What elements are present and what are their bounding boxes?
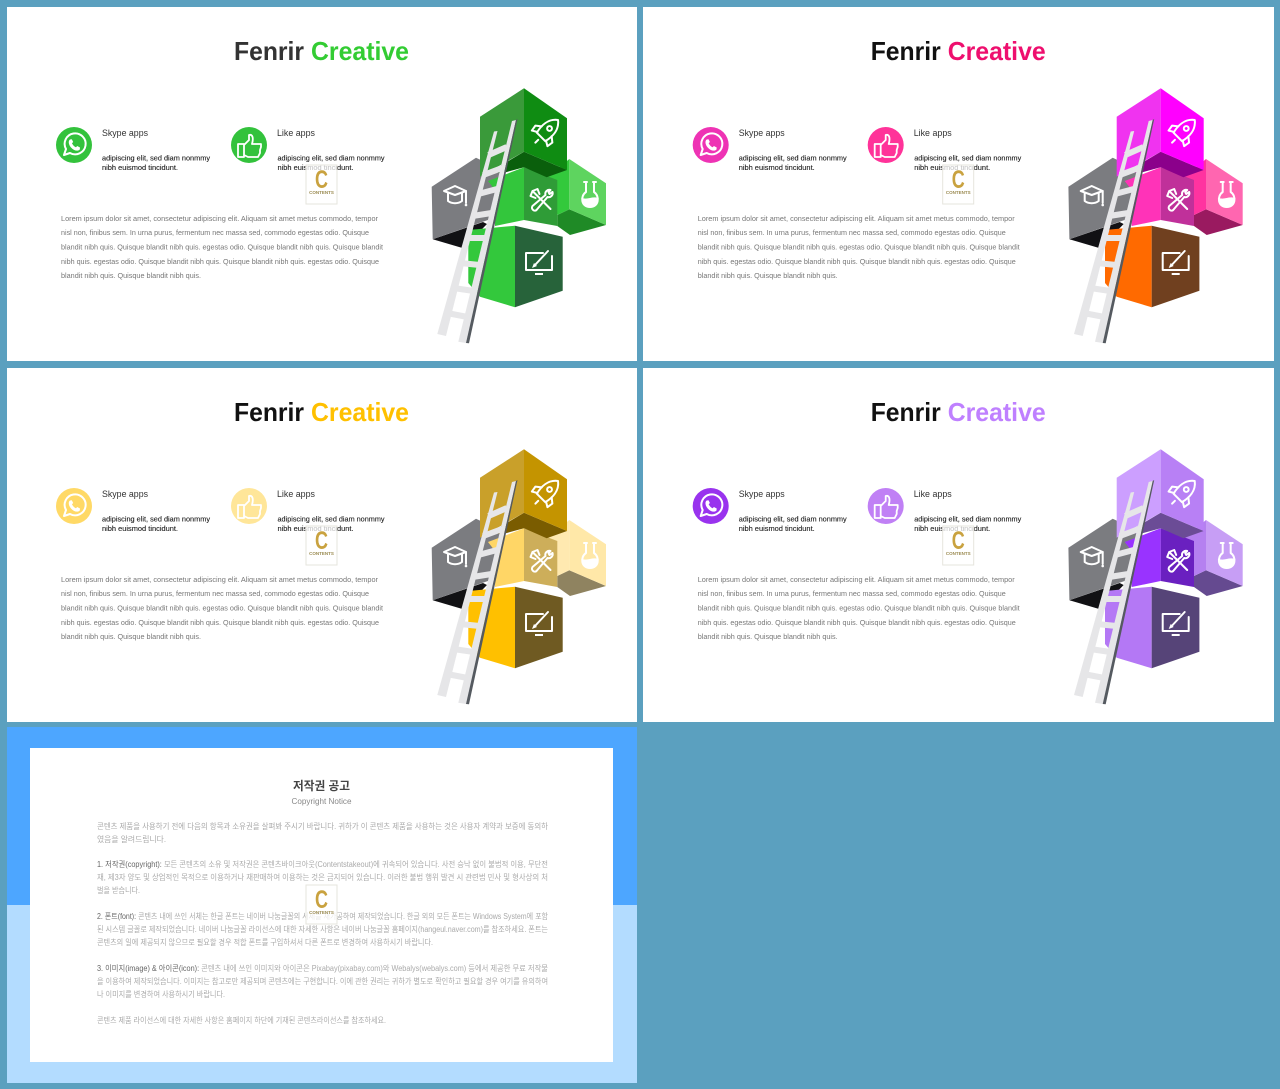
icon: whatsapp circle — [56, 127, 92, 163]
title — [234, 397, 409, 427]
copyright heading: Copyright Notice — [292, 796, 352, 806]
ladder — [437, 119, 518, 343]
clause 1: copyright: 벌을 받습니다. — [97, 885, 140, 895]
body text: nibh quis. egestas odio. Quisque blandit nibh quis. Quisque blandit nibh quis. egestas odio. Quisque — [61, 259, 379, 266]
feature: Skype apps — [102, 489, 210, 533]
title — [871, 36, 1046, 66]
feature: Skype apps: Skype apps — [102, 489, 148, 499]
title: Creative — [948, 36, 1046, 66]
title: Fenrir — [234, 397, 304, 427]
feature: Skype apps: adipiscing elit, sed diam nonmmy — [102, 154, 210, 162]
body text: Lorem ipsum dolor sit amet, consectetur adipiscing elit. Aliquam sit amet metus commodo, tempor — [61, 216, 379, 223]
clause 3: image and icon: 나 이미지를 변경하여 사용하시기 바랍니다. — [97, 989, 225, 999]
cube: rocket — [1117, 449, 1204, 538]
feature: Skype apps: nibh euismod tincidunt. — [739, 524, 815, 533]
copyright heading — [292, 778, 352, 806]
icon: whatsapp circle — [56, 488, 92, 524]
ladder — [1074, 480, 1154, 704]
feature: Like apps: nibh euismod tincidunt. — [278, 524, 354, 533]
cube: monitor — [468, 587, 563, 668]
cube stack with ladder — [432, 88, 606, 343]
watermark logo: C — [952, 527, 965, 555]
license note: 콘텐츠 제품 라이선스에 대한 자세한 사항은 홈페이지 하단에 기재된 콘텐츠라이선스를 참조하세요. — [97, 1015, 386, 1025]
feature: Skype apps: Skype apps — [739, 489, 785, 499]
watermark logo — [943, 165, 974, 204]
title — [871, 397, 1046, 427]
body text: blandit nibh quis. Quisque blandit nibh quis. — [61, 273, 201, 280]
icon: whatsapp circle — [693, 488, 729, 524]
feature: Skype apps — [102, 128, 210, 172]
cube: graduation cap — [432, 158, 502, 248]
clause 1: copyright — [97, 859, 548, 895]
watermark logo: CONTENTS — [946, 190, 971, 195]
panel: copyright notice — [7, 727, 637, 1083]
feature: Like apps — [277, 128, 385, 172]
cube: graduation cap — [432, 519, 502, 609]
feature: Like apps: adipiscing elit, sed diam nonmmy — [278, 154, 385, 162]
body text — [61, 216, 383, 280]
cube: flask — [548, 159, 606, 235]
clause 3: image and icon — [97, 963, 548, 999]
cube: tools — [488, 528, 557, 587]
cube: flask — [548, 520, 606, 596]
copyright intro — [97, 821, 549, 844]
cube: flask — [1185, 159, 1243, 235]
cube: monitor — [468, 226, 563, 307]
copyright intro: 콘텐츠 제품을 사용하기 전에 다음의 항목과 소유권을 살펴봐 주시기 바랍니다. 귀하가 이 콘텐츠 제품을 사용하는 것은 사용자 계약과 보증에 동의하 — [97, 821, 549, 831]
copyright heading: 저작권 공고 — [293, 778, 350, 793]
feature: Like apps: adipiscing elit, sed diam nonmmy — [914, 514, 1021, 524]
title — [234, 36, 409, 66]
body text: blandit nibh quis. Quisque blandit nibh quis. egestas odio. Quisque blandit nibh quis. Quisque blandit — [61, 244, 383, 252]
watermark logo — [306, 526, 337, 565]
body text: blandit nibh quis. Quisque blandit nibh quis. egestas odio. Quisque blandit nibh quis. Quisque blandit — [698, 606, 1020, 612]
watermark logo: CONTENTS — [946, 551, 971, 556]
title: Fenrir — [234, 36, 304, 66]
feature: Like apps: Like apps — [277, 489, 315, 499]
watermark logo — [306, 165, 337, 204]
body text: nisl non, finibus sem. In urna purus, fermentum nec massa sed, commodo egestas odio. Quisque — [698, 230, 1006, 237]
feature: Skype apps: adipiscing elit, sed diam nonmmy — [739, 154, 847, 162]
feature: Skype apps: nibh euismod tincidunt. — [102, 524, 178, 533]
clause 3: image and icon: 3. 이미지(image) & 아이콘(icon): 콘텐츠 내에 쓰인 이미지와 아이콘은 Pixabay(pixabay.com)와 Webalys(webalys.com) 등에서 제공한 무료 저작물 — [97, 963, 548, 973]
title: Creative — [311, 36, 409, 66]
feature: Skype apps: Skype apps — [102, 128, 148, 138]
body text — [61, 577, 383, 641]
watermark logo: C — [315, 527, 328, 555]
body text: nisl non, finibus sem. In urna purus, fermentum nec massa sed, commodo egestas odio. Quisque — [61, 591, 369, 598]
clause 2: font: 콘텐츠의 일에 제공되지 않으므로 필요할 경우 적합 폰트를 구입하셔서 다른 폰트로 변경하여 사용하시기 바랍니다. — [97, 937, 433, 947]
feature: Skype apps: nibh euismod tincidunt. — [739, 163, 815, 172]
feature: Skype apps — [739, 489, 847, 533]
body text: blandit nibh quis. Quisque blandit nibh quis. egestas odio. Quisque blandit nibh quis. Quisque blandit — [61, 606, 383, 612]
feature: Skype apps: Skype apps — [739, 128, 785, 138]
title: Creative — [311, 397, 409, 427]
clause 3: image and icon: 을 이용하여 제작되었습니다. 이미지는 참고로만 제공되며 콘텐츠에는 구현합니다. 이에 관한 권리는 귀하가 별도로 확인하고 필요할 경우 여기를 유의하여 — [97, 976, 548, 986]
icon: thumbs up circle — [231, 488, 267, 524]
cube stack with ladder — [432, 449, 606, 704]
feature: Like apps: nibh euismod tincidunt. — [278, 163, 354, 172]
cube: monitor — [1105, 587, 1199, 668]
cube: tools — [1125, 528, 1194, 587]
body text: Lorem ipsum dolor sit amet, consectetur adipiscing elit. Aliquam sit amet metus commodo, tempor — [698, 577, 1015, 584]
clause 2: font — [97, 911, 549, 947]
feature: Like apps: nibh euismod tincidunt. — [914, 163, 990, 172]
watermark logo — [306, 885, 337, 924]
body text: blandit nibh quis. Quisque blandit nibh quis. — [698, 273, 838, 280]
cube: graduation cap — [1068, 519, 1139, 609]
feature: Skype apps: nibh euismod tincidunt. — [102, 163, 178, 172]
body text: blandit nibh quis. Quisque blandit nibh quis. egestas odio. Quisque blandit nibh quis. Quisque blandit — [698, 244, 1020, 252]
cube: monitor — [1105, 226, 1199, 307]
cube: flask — [1185, 520, 1243, 596]
title: Creative — [948, 397, 1046, 427]
panel: purple slide — [643, 368, 1274, 722]
feature: Like apps: Like apps — [277, 128, 315, 138]
body text: Lorem ipsum dolor sit amet, consectetur adipiscing elit. Aliquam sit amet metus commodo, tempor — [698, 216, 1015, 223]
clause 2: font: 된 시스템 글꼴로 제작되었습니다. 네이버 나눔글꼴 라이선스에 대한 자세한 사항은 네이버 나눔글꼴 홈페이지(hangeul.naver.com)를 참조하세요. 폰트는 — [97, 924, 548, 934]
watermark logo: C — [952, 166, 965, 194]
feature: Like apps: adipiscing elit, sed diam nonmmy — [278, 514, 385, 524]
ladder — [437, 480, 518, 704]
title: Fenrir — [871, 36, 941, 66]
body text: nisl non, finibus sem. In urna purus, fermentum nec massa sed, commodo egestas odio. Quisque — [698, 591, 1006, 598]
cube: tools — [1125, 167, 1194, 226]
body text: Lorem ipsum dolor sit amet, consectetur adipiscing elit. Aliquam sit amet metus commodo, tempor — [61, 577, 379, 584]
body text: nibh quis. egestas odio. Quisque blandit nibh quis. Quisque blandit nibh quis. egestas odio. Quisque — [698, 259, 1016, 266]
icon: thumbs up circle — [868, 127, 904, 163]
body text: nibh quis. egestas odio. Quisque blandit nibh quis. Quisque blandit nibh quis. egestas odio. Quisque — [698, 620, 1016, 627]
cube stack with ladder — [1068, 88, 1243, 343]
feature: Skype apps: adipiscing elit, sed diam nonmmy — [739, 514, 847, 524]
watermark logo — [943, 526, 974, 565]
body text: nisl non, finibus sem. In urna purus, fermentum nec massa sed, commodo egestas odio. Quisque — [61, 230, 369, 237]
body text: nibh quis. egestas odio. Quisque blandit nibh quis. Quisque blandit nibh quis. egestas odio. Quisque — [61, 620, 379, 627]
cube: rocket — [1117, 88, 1204, 177]
feature: Like apps: nibh euismod tincidunt. — [914, 524, 990, 533]
cube: graduation cap — [1068, 158, 1139, 248]
icon: thumbs up circle — [231, 127, 267, 163]
feature: Like apps: adipiscing elit, sed diam nonmmy — [914, 154, 1021, 162]
title: Fenrir — [871, 397, 941, 427]
clause 2: font: 2. 폰트(font): 콘텐츠 내에 쓰인 서체는 한글 폰트는 네이버 나눔글꼴의 서체를 재가공하여 제작되었습니다. 한글 외의 모든 폰트는 Windows System에 포함 — [97, 911, 549, 921]
icon: whatsapp circle — [693, 127, 729, 163]
panel: yellow slide — [7, 368, 637, 722]
clause 1: copyright: 재, 제3자 양도 및 상업적인 목적으로 이용하거나 재판매하여 이용하는 것은 금지되어 있습니다. 이러한 불법 행위 발견 시 관련법 민사 및 형사상의 처 — [97, 872, 548, 882]
watermark logo: C — [315, 166, 328, 194]
cube: rocket — [480, 88, 567, 177]
copyright intro: 였음을 알려드립니다. — [97, 834, 166, 844]
icon: thumbs up circle — [868, 488, 904, 524]
clause 1: copyright: 1. 저작권(copyright): 모든 콘텐츠의 소유 및 저작권은 콘텐츠바이크아웃(Contentstakeout)에 귀속되어 있습니다. 사전 승낙 없이 불법적 이용, 무단전 — [97, 859, 548, 869]
cube: rocket — [480, 449, 567, 538]
panel: green slide — [7, 7, 637, 361]
watermark logo: CONTENTS — [309, 551, 334, 556]
feature: Like apps: Like apps — [914, 489, 952, 499]
ladder — [1074, 119, 1154, 343]
watermark logo: C — [315, 886, 328, 914]
watermark logo: CONTENTS — [309, 910, 334, 915]
body text: blandit nibh quis. Quisque blandit nibh quis. — [61, 634, 201, 641]
feature: Skype apps: adipiscing elit, sed diam nonmmy — [102, 514, 210, 524]
cube: tools — [488, 167, 557, 226]
body text — [698, 216, 1020, 280]
feature: Like apps: Like apps — [914, 128, 952, 138]
feature: Skype apps — [739, 128, 847, 172]
cube stack with ladder — [1068, 449, 1243, 704]
feature: Like apps — [914, 128, 1021, 172]
feature: Like apps — [914, 489, 1021, 533]
body text: blandit nibh quis. Quisque blandit nibh quis. — [698, 634, 838, 641]
feature: Like apps — [277, 489, 385, 533]
body text — [698, 577, 1020, 641]
watermark logo: CONTENTS — [309, 190, 334, 195]
panel: pink slide — [643, 7, 1274, 361]
